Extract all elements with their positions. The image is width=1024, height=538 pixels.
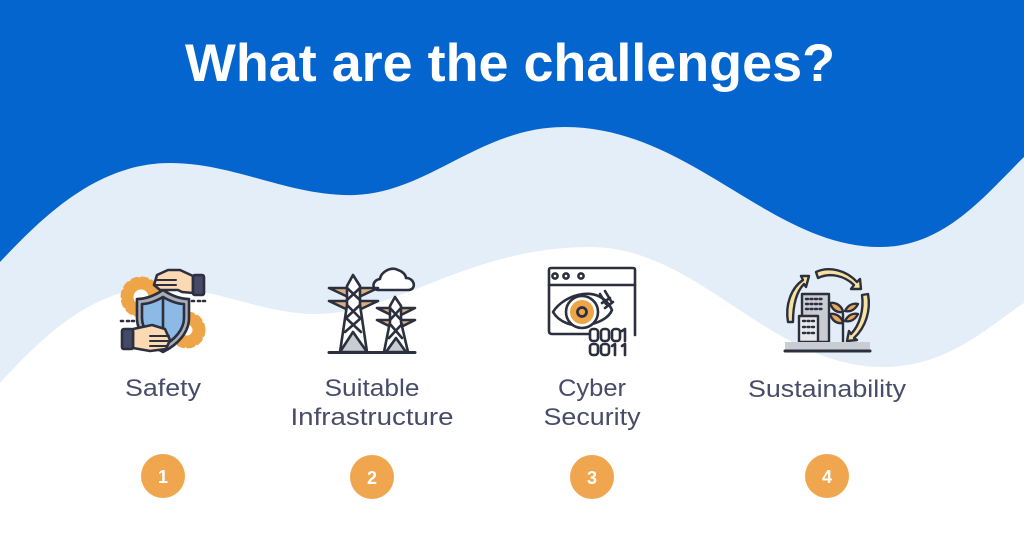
label: Suitable Infrastructure: Infrastructure (290, 404, 454, 431)
large tower (329, 288, 378, 296)
number badge 4: 4 (822, 467, 832, 487)
top hand (154, 270, 193, 293)
bottom hand (133, 325, 170, 351)
arrows (787, 276, 809, 322)
label: Cyber Security: Security (544, 404, 640, 431)
title: What are the challenges? (185, 34, 835, 93)
gear right (177, 320, 197, 340)
dark blue header wave (0, 0, 1024, 262)
ground line (329, 351, 415, 354)
label: Sustainability: Sustainability (748, 376, 906, 403)
number badge 3 (570, 455, 614, 499)
icon: safety shield with hands and gears (121, 270, 205, 352)
buildings (802, 294, 829, 342)
gear left (129, 285, 153, 309)
binary digits (590, 329, 598, 341)
cloud (373, 269, 414, 290)
light blue wave band (0, 100, 1024, 383)
number badge 3: 3 (587, 468, 597, 488)
number badge 4 (805, 454, 849, 498)
label: Cyber Security (544, 375, 640, 431)
number badge 2 (350, 455, 394, 499)
label: Safety: Safety (125, 375, 201, 402)
label: Suitable Infrastructure (290, 375, 454, 431)
plant (842, 314, 844, 345)
small tower (377, 308, 415, 315)
icon: power towers and cloud (329, 269, 415, 352)
number badge 1: 1 (158, 467, 168, 487)
shield (137, 290, 189, 352)
number badge 2: 2 (367, 468, 377, 488)
icon: browser eye and binary (549, 268, 635, 355)
label: Suitable Infrastructure: Suitable (324, 375, 420, 402)
number badge 1 (141, 454, 185, 498)
ground (785, 342, 870, 350)
eye (553, 294, 612, 325)
label: Cyber Security: Cyber (558, 375, 626, 402)
icon: sustainable city cycle (785, 269, 870, 351)
